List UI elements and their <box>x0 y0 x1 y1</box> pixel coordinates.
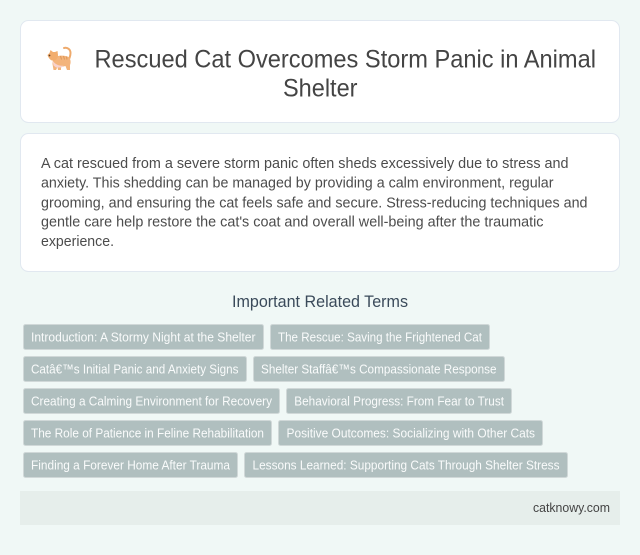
tag: staff response: Shelter Staffâ€™s Compassionate Response <box>261 361 496 376</box>
tag: patience <box>24 420 272 446</box>
panel: description card <box>20 134 620 272</box>
tag: positive outcomes: Positive Outcomes: Socializing with Other Cats <box>286 425 535 440</box>
text block: description: anxiety. This shedding can be managed by providing a calm environment, regular <box>41 175 554 192</box>
title: Shelter <box>283 74 358 102</box>
tag: lessons learned: Lessons Learned: Supporting Cats Through Shelter Stress <box>252 457 560 472</box>
text block: description: gentle care help restore the cat's coat and overall well-being after the traumatic <box>41 214 544 231</box>
tag: initial panic: Catâ€™s Initial Panic and Anxiety Signs <box>31 361 239 376</box>
footer bar <box>20 491 620 525</box>
footer text: site name: catknowy.com <box>533 500 610 515</box>
tag: forever home: Finding a Forever Home After Trauma <box>31 457 231 472</box>
tag: staff response <box>254 356 504 382</box>
text block: description: experience. <box>41 233 114 250</box>
panel: related term tags <box>24 324 568 478</box>
icon: orange cat <box>48 48 71 70</box>
tag: patience: The Role of Patience in Feline Rehabilitation <box>31 425 264 440</box>
heading: important related terms: Important Related Terms <box>232 292 408 311</box>
tag: forever home <box>24 452 238 478</box>
tag: introduction: Introduction: A Stormy Night at the Shelter <box>31 329 256 344</box>
panel: title card <box>20 20 620 122</box>
text block: description: grooming, and ensuring the cat feels safe and secure. Stress-reducing techniques and <box>41 194 588 211</box>
tag: introduction <box>24 324 264 350</box>
text block: description <box>41 155 588 250</box>
tag: positive outcomes <box>278 420 542 446</box>
tag: the rescue <box>270 324 490 350</box>
tag: calming environment <box>24 388 280 414</box>
tag: calming environment: Creating a Calming Environment for Recovery <box>31 393 272 408</box>
tag: behavioral progress <box>286 388 512 414</box>
title: Rescued Cat Overcomes Storm Panic in Animal <box>94 46 596 74</box>
tag: the rescue: The Rescue: Saving the Frightened Cat <box>278 329 482 344</box>
tag: lessons learned <box>244 452 568 478</box>
title <box>94 46 596 102</box>
tag: initial panic <box>24 356 246 382</box>
text block: description: A cat rescued from a severe storm panic often sheds excessively due to stress and <box>41 155 568 172</box>
tag: behavioral progress: Behavioral Progress: From Fear to Trust <box>294 393 504 408</box>
